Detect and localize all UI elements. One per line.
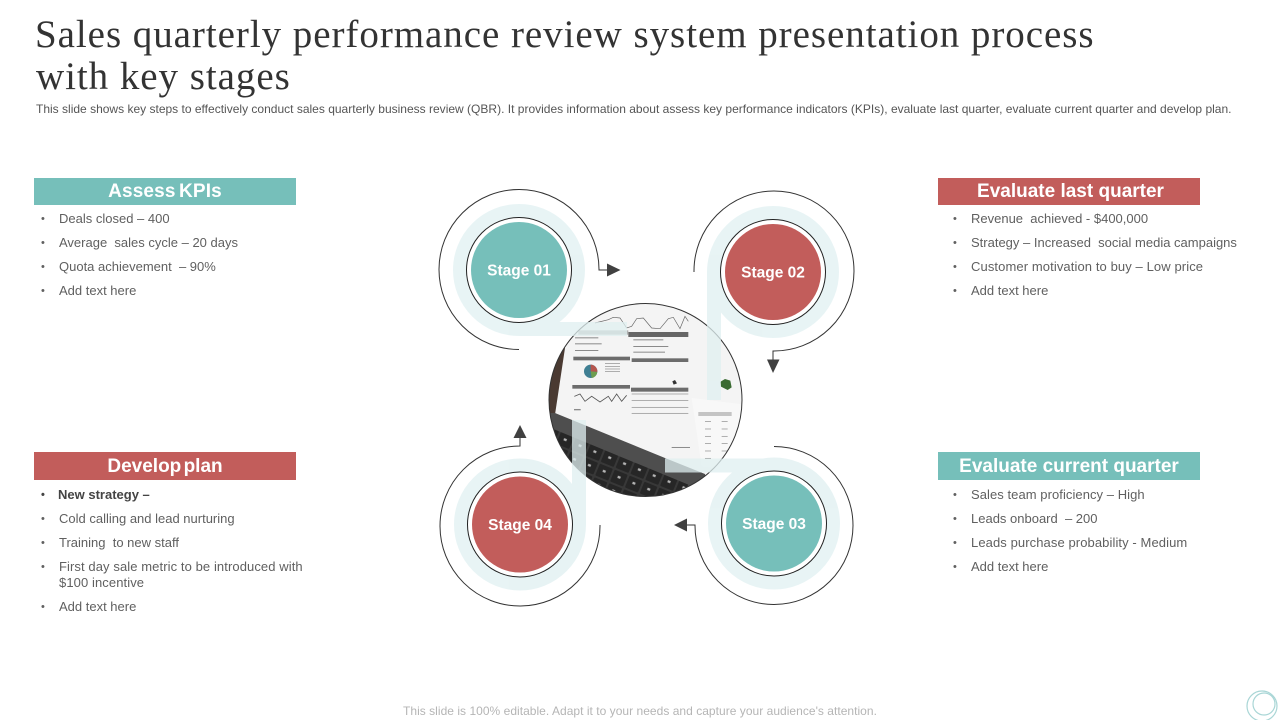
heading: Assess KPIs: Assess KPIs	[108, 181, 222, 202]
list: Evaluate current quarter	[953, 487, 1187, 574]
list: Evaluate last quarter: Add text here	[971, 283, 1048, 298]
title: with key stages	[36, 55, 291, 98]
heading: Develop plan: Develop plan	[107, 456, 223, 477]
list: Develop plan	[41, 487, 303, 614]
title: Sales quarterly performance review system presentation process	[35, 13, 1095, 56]
stage 03 node	[722, 471, 826, 576]
text: •	[41, 489, 45, 501]
text: •	[953, 561, 957, 573]
text: •	[41, 601, 45, 613]
central photo: laptop with analytics report	[550, 304, 742, 496]
stage 02 node	[720, 220, 826, 324]
stage 01 node	[466, 218, 572, 322]
pale ring and connector: stage 02	[707, 213, 832, 400]
stage 01 node: Stage 01	[487, 262, 551, 280]
list: Evaluate last quarter: Revenue achieved - $400,000	[971, 211, 1148, 226]
list: Develop plan: New strategy –	[58, 487, 150, 502]
arrow: stage 02 to stage 03	[694, 191, 854, 373]
subtitle: This slide shows key steps to effectively conduct sales quarterly business review (QBR). It provides information about assess key performance indicators (KPIs), evaluate last quarter, evaluate current quarter and develop plan.	[36, 102, 1232, 116]
heading: Evaluate last quarter	[938, 178, 1200, 205]
stage 04 node: Stage 04	[488, 517, 552, 534]
heading: Evaluate current quarter	[938, 452, 1200, 480]
list: Evaluate last quarter	[953, 211, 1237, 298]
text: •	[953, 285, 957, 297]
text: •	[953, 213, 957, 225]
heading: Develop plan	[34, 452, 296, 480]
list: Evaluate last quarter: Customer motivation to buy – Low price	[971, 259, 1203, 274]
pale ring and connector: stage 04	[461, 420, 586, 584]
heading: Evaluate last quarter: Evaluate last quarter	[977, 181, 1164, 202]
heading: Evaluate current quarter: Evaluate current quarter	[959, 456, 1179, 477]
list: Develop plan: First day sale metric to be introduced with $100 incentive	[59, 559, 303, 590]
text: •	[41, 561, 45, 573]
arrow: stage 01 to stage 02	[439, 190, 620, 350]
list: Assess KPIs	[41, 211, 238, 298]
list: Assess KPIs: Quota achievement – 90%	[59, 259, 216, 274]
stage 03 node: Stage 03	[742, 516, 806, 533]
arrow: stage 04 to stage 01	[440, 425, 600, 606]
list: Evaluate current quarter: Leads purchase probability - Medium	[971, 535, 1187, 550]
text: •	[41, 213, 45, 225]
heading: Assess KPIs	[34, 178, 296, 205]
corner logo	[1247, 691, 1277, 720]
pale ring and connector: stage 01	[460, 211, 627, 336]
stage 04 node	[468, 472, 572, 577]
text: •	[953, 513, 957, 525]
text: •	[953, 261, 957, 273]
text: •	[41, 537, 45, 549]
title	[35, 13, 1095, 98]
list: Assess KPIs: Add text here	[59, 283, 136, 298]
list: Develop plan: Training to new staff	[59, 535, 179, 550]
text: •	[41, 285, 45, 297]
list: Evaluate last quarter: Strategy – Increased social media campaigns	[971, 235, 1237, 250]
text: •	[953, 537, 957, 549]
footer note: This slide is 100% editable. Adapt it to your needs and capture your audience's attention.	[403, 704, 877, 718]
text: •	[41, 261, 45, 273]
list: Assess KPIs: Deals closed – 400	[59, 211, 170, 226]
text: •	[953, 489, 957, 501]
list: Evaluate current quarter: Leads onboard – 200	[971, 511, 1098, 526]
list: Evaluate current quarter: Add text here	[971, 559, 1048, 574]
text: •	[41, 237, 45, 249]
stage 02 node: Stage 02	[741, 264, 805, 282]
text: •	[41, 513, 45, 525]
list: Assess KPIs: Average sales cycle – 20 days	[59, 235, 238, 250]
list: Develop plan: Add text here	[59, 599, 136, 614]
stage cycle diagram	[438, 189, 1278, 720]
list: Evaluate current quarter: Sales team proficiency – High	[971, 487, 1145, 502]
arrow: stage 03 to stage 04	[674, 446, 853, 604]
photo border	[549, 304, 742, 496]
text: •	[953, 237, 957, 249]
list: Develop plan: Cold calling and lead nurturing	[59, 511, 235, 526]
pale ring and connector: stage 03	[665, 458, 833, 582]
